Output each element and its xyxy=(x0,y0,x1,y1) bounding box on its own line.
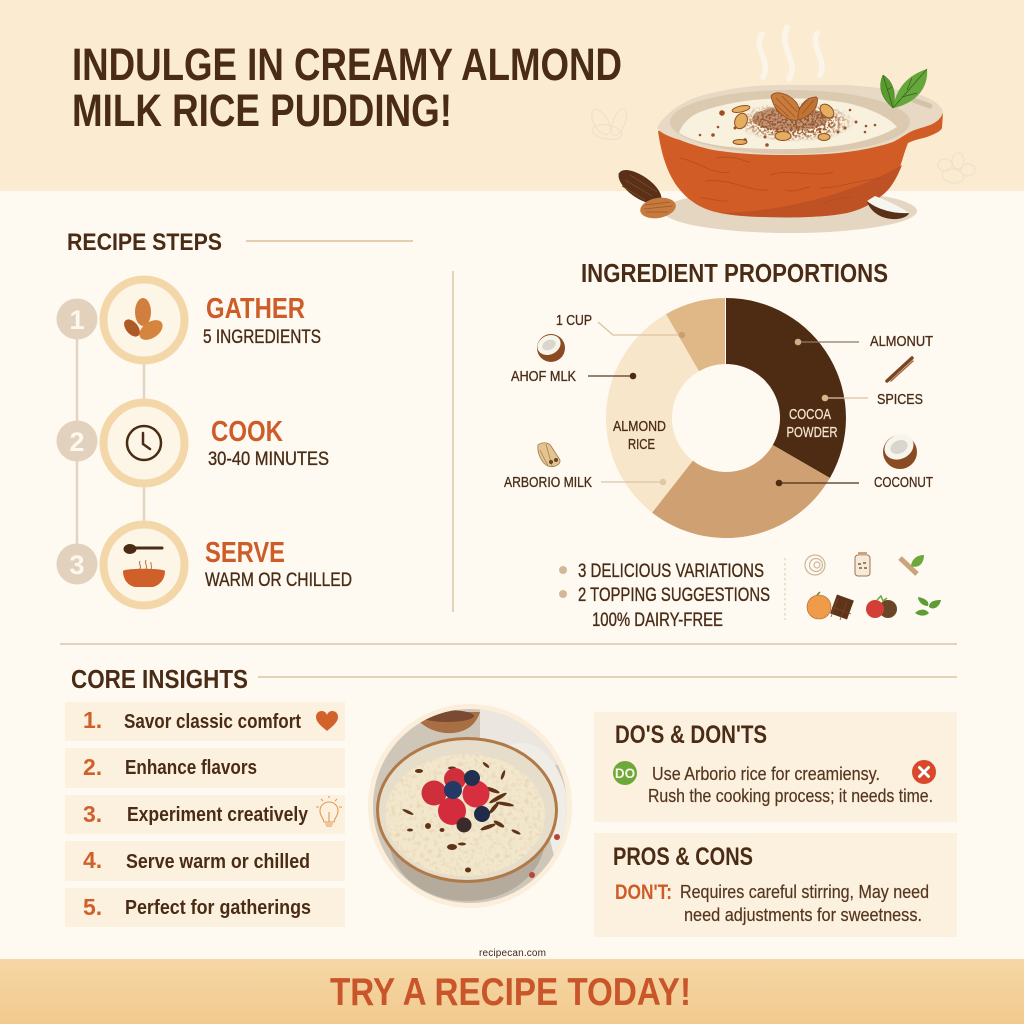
insight 3 xyxy=(65,795,345,834)
step 2: cook: 30-40 MINUTES xyxy=(208,448,329,470)
icon: leaves xyxy=(915,597,941,616)
insight 4: Serve warm or chilled xyxy=(126,851,310,873)
leader lines and labels: ALMONUT xyxy=(870,334,933,350)
leader lines and labels: SPICES xyxy=(877,392,923,408)
header band xyxy=(0,0,1024,191)
pudding xyxy=(679,98,897,149)
title xyxy=(72,39,622,136)
icon: don't badge xyxy=(912,760,936,784)
icon: orange xyxy=(807,592,831,619)
panel: pros and cons: PROS & CONS xyxy=(613,843,753,871)
icon: jar xyxy=(855,552,870,576)
step 1: gather: 5 INGREDIENTS xyxy=(203,326,321,348)
panel: recipe steps xyxy=(56,229,413,606)
donut chart: RICE xyxy=(628,437,655,453)
icon: chocolate xyxy=(830,595,854,620)
insight 5: 5. xyxy=(83,894,102,920)
cocoa pod xyxy=(613,164,667,210)
insight 3: 3. xyxy=(83,801,102,827)
key facts list: 3 DELICIOUS VARIATIONS xyxy=(578,560,764,582)
icon: do badge: DO xyxy=(615,766,635,781)
icon: swirl xyxy=(805,555,825,575)
title: MILK RICE PUDDING! xyxy=(72,85,452,136)
footer call to action: TRY A RECIPE TODAY! xyxy=(330,971,691,1014)
panel: do's and don'ts xyxy=(594,712,957,822)
panel: do's and don'ts: DO'S & DON'TS xyxy=(615,721,767,749)
leader lines and labels: ARBORIO MILK xyxy=(504,475,592,491)
title: INDULGE IN CREAMY ALMOND xyxy=(72,39,622,90)
donut chart: COCOA xyxy=(789,406,831,423)
icon: spoon and bowl xyxy=(123,544,165,587)
almond slices on pudding xyxy=(732,101,837,144)
icon: do badge xyxy=(613,761,637,785)
panel: pros and cons xyxy=(594,833,957,937)
icon: coconut right xyxy=(880,430,918,469)
insight 3: Experiment creatively xyxy=(127,804,309,826)
insight 4: 4. xyxy=(83,847,102,873)
insight 1: Savor classic comfort xyxy=(124,711,301,733)
chocolate shavings xyxy=(402,761,521,872)
insight 4 xyxy=(65,841,345,881)
panel: do's and don'ts: Rush the cooking process; it needs time. xyxy=(648,786,933,806)
icon: clock xyxy=(127,426,161,460)
panel: ingredient proportions xyxy=(504,260,941,631)
almond xyxy=(639,195,677,221)
leader lines and labels: AHOF MLK xyxy=(511,369,576,385)
coconut piece xyxy=(867,196,909,219)
step 3: serve: SERVE xyxy=(205,537,285,569)
step 3: serve: 3 xyxy=(69,550,85,580)
hero illustration: bowl of rice pudding xyxy=(613,27,943,233)
panel: pros and cons: Requires careful stirring, May need xyxy=(680,882,929,902)
step 1: gather: 1 xyxy=(69,305,85,335)
icon: heart xyxy=(316,711,338,731)
icon: light bulb xyxy=(316,796,342,826)
step 3: serve: WARM OR CHILLED xyxy=(205,569,352,591)
bowl body xyxy=(658,113,943,217)
icon: rice husk xyxy=(538,443,560,467)
rim xyxy=(657,85,943,155)
icon: cinnamon and leaf xyxy=(900,555,924,574)
panel: core insights xyxy=(65,666,957,927)
insight 2: 2. xyxy=(83,754,102,780)
insight 2: Enhance flavors xyxy=(125,757,257,779)
core insights heading: CORE INSIGHTS xyxy=(71,666,248,694)
proportions heading: INGREDIENT PROPORTIONS xyxy=(581,260,888,288)
icon: almonds xyxy=(121,298,166,344)
panel: do's and don'ts: Use Arborio rice for creamiensy. xyxy=(652,764,880,784)
insight 2 xyxy=(65,748,345,788)
panel: pros and cons: DON'T: xyxy=(615,881,672,904)
step 2: cook: COOK xyxy=(211,416,283,448)
leaves xyxy=(881,69,927,108)
panel: pros and cons: need adjustments for sweetness. xyxy=(684,905,922,925)
insight 1: 1. xyxy=(83,707,102,733)
leader lines and labels: 1 CUP xyxy=(556,313,592,329)
footer call to action xyxy=(0,959,1024,1024)
insight 1 xyxy=(65,702,345,741)
key facts list xyxy=(559,560,770,631)
source credit: recipecan.com xyxy=(479,948,546,959)
step 3: serve xyxy=(56,524,352,606)
icon: strawberry and nut xyxy=(866,596,897,618)
leader lines and labels xyxy=(504,313,933,491)
recipe steps heading: RECIPE STEPS xyxy=(67,229,222,256)
steam xyxy=(759,27,822,79)
step 2: cook xyxy=(56,402,329,484)
key facts list: 100% DAIRY-FREE xyxy=(592,609,723,631)
icon: cinnamon sticks xyxy=(887,358,913,381)
step 1: gather xyxy=(56,280,321,360)
photo: bowl of rice pudding with berries xyxy=(368,700,572,910)
icon: coconut left xyxy=(534,331,565,362)
key facts list: 2 TOPPING SUGGESTIONS xyxy=(578,584,770,606)
donut chart: POWDER xyxy=(786,424,838,441)
step 1: gather: GATHER xyxy=(206,293,305,325)
insight 5: Perfect for gatherings xyxy=(125,897,311,919)
decorative faint almonds xyxy=(588,106,975,185)
donut chart xyxy=(606,298,846,538)
red specks lower right xyxy=(529,834,560,878)
step 2: cook: 2 xyxy=(69,427,85,457)
whole almonds on top xyxy=(771,93,818,120)
shadow xyxy=(663,189,917,233)
donut chart: ALMOND xyxy=(613,419,666,435)
insight 5 xyxy=(65,888,345,927)
berries xyxy=(422,768,490,832)
leader lines and labels: COCONUT xyxy=(874,475,933,491)
